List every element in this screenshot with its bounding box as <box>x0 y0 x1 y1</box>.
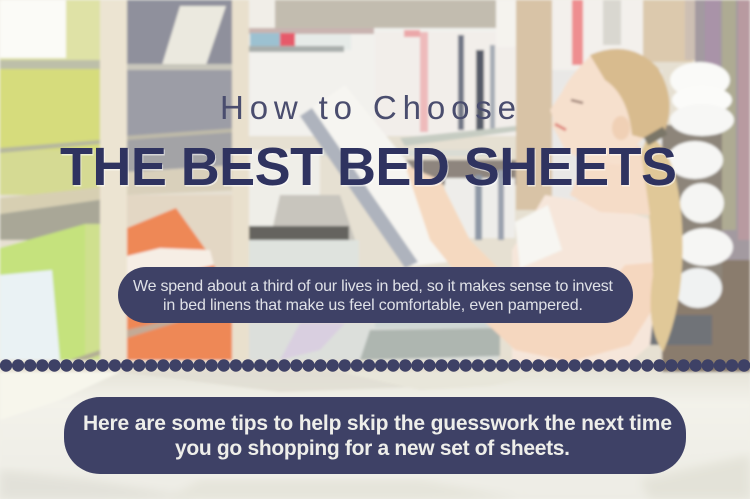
wooden posts <box>100 0 127 360</box>
title line 1: How to Choose <box>220 89 516 126</box>
tips callout: you go shopping for a new set of sheets. <box>175 437 570 460</box>
dotted divider <box>0 359 750 372</box>
intro callout <box>118 267 633 323</box>
hair <box>590 49 670 140</box>
blouse <box>512 195 676 362</box>
intro text: We spend about a third of our lives in bed, so it makes sense to invest <box>133 278 614 295</box>
left shelves with green packages <box>0 0 115 360</box>
lower arm <box>485 262 668 362</box>
title line 2: THE BEST BED SHEETS <box>60 137 677 197</box>
ponytail <box>640 135 683 352</box>
woman <box>405 49 683 362</box>
intro callout: in bed linens that make us feel comfortable, even pampered. <box>163 297 583 314</box>
orange package <box>127 208 232 360</box>
wooden upright and far shelf <box>516 0 552 210</box>
face <box>550 56 650 165</box>
pill background <box>64 397 686 474</box>
centre shelves with stacked fabric <box>249 0 525 360</box>
pill background <box>118 267 633 323</box>
tips callout <box>64 397 686 474</box>
dark packaged sheets <box>127 0 255 355</box>
neck <box>570 145 650 215</box>
patterned fabric and pillows at right <box>640 0 750 372</box>
tips text: Here are some tips to help skip the guesswork the next time <box>83 412 672 435</box>
title shadow: THE BEST BED SHEETS <box>61 138 678 198</box>
arm reaching to the shelf <box>405 165 520 330</box>
ear <box>612 116 630 140</box>
title <box>60 89 678 198</box>
package held by the woman <box>300 85 450 266</box>
bed sheets at the bottom <box>0 372 750 499</box>
